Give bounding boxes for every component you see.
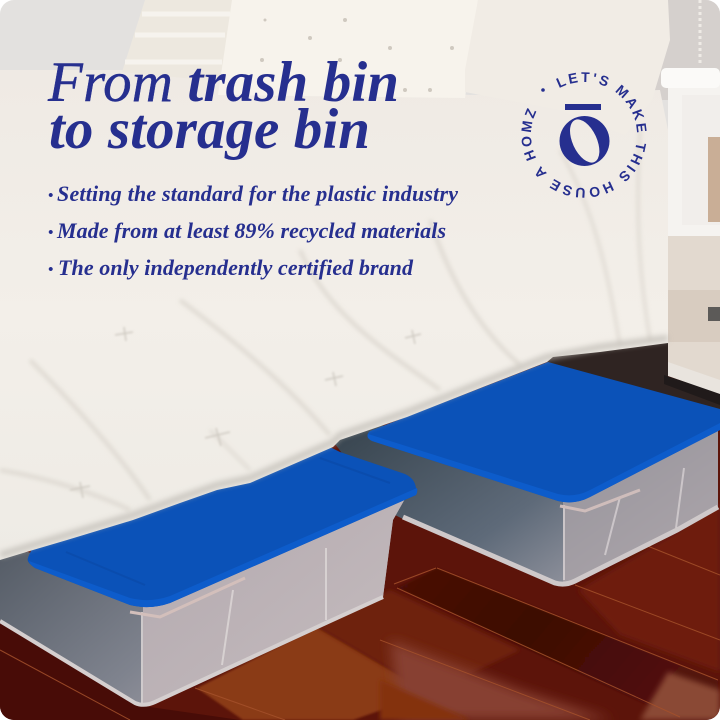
title	[48, 61, 396, 160]
storage bin: front left	[0, 445, 417, 706]
dark gap under bed	[548, 343, 720, 409]
bin lid	[367, 362, 720, 502]
feature bullet list: Made from at least 89% recycled materials	[56, 218, 446, 243]
title: From trash bin	[47, 51, 399, 114]
feature bullet list: •	[48, 262, 53, 278]
slogan start dot	[541, 88, 545, 92]
feature bullet list: •	[48, 188, 53, 204]
floor	[0, 340, 720, 720]
photo background: wall	[0, 0, 668, 130]
circular slogan: LET'S MAKE THIS HOUSE A HOMZ	[521, 72, 647, 198]
logo badge	[521, 72, 647, 198]
title: to storage bin	[49, 98, 370, 161]
pillows	[123, 0, 670, 98]
bed comforter	[0, 70, 668, 560]
feature bullet list: •	[48, 225, 53, 241]
bin body	[332, 420, 718, 585]
headboard	[650, 0, 720, 100]
feature bullet list	[48, 181, 458, 280]
feature bullet list: Setting the standard for the plastic industry	[57, 181, 458, 206]
feature bullet list: The only independently certified brand	[58, 255, 414, 280]
nightstand	[661, 68, 720, 405]
storage bin: back right	[332, 362, 720, 585]
bin body	[0, 490, 410, 706]
logo mark	[560, 104, 610, 166]
bin lid	[28, 445, 416, 607]
